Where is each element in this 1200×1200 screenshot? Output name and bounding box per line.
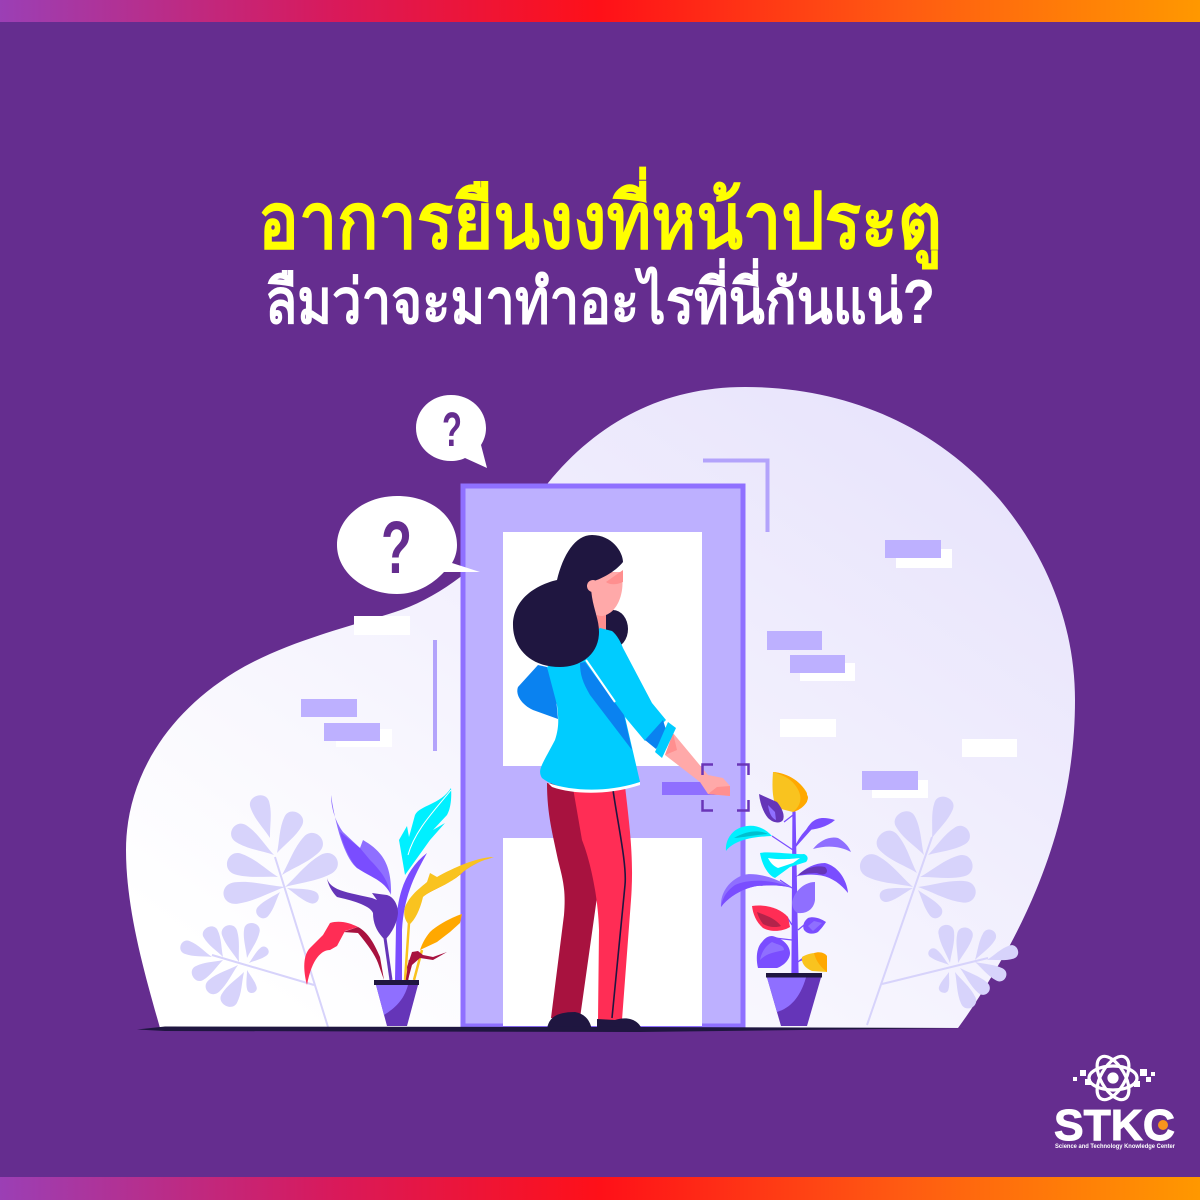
pants seam [612, 790, 625, 1018]
plant left [304, 788, 494, 1026]
white leaf centre [768, 858, 800, 868]
pot highlight [767, 978, 806, 1012]
dark purple leaf [327, 878, 398, 940]
violet top leaf [806, 818, 835, 830]
orange leaf edge [814, 952, 827, 972]
shirt hem [548, 782, 640, 793]
shirt [540, 628, 666, 792]
question mark small: ? [442, 404, 462, 457]
shoes [547, 1012, 642, 1030]
left leaf shade [721, 881, 792, 907]
title [258, 166, 942, 337]
cyan heart leaf [760, 852, 808, 878]
arm [665, 733, 730, 796]
pot [376, 985, 418, 1026]
door upper window [503, 532, 702, 766]
logo tagline: Science and Technology Knowledge Center [1055, 1144, 1176, 1150]
question mark large: ? [381, 506, 412, 589]
shirt fold [580, 662, 632, 750]
background blob [126, 387, 1075, 1028]
door frame [463, 486, 743, 1026]
lavender leaf [813, 837, 851, 852]
pot rim [766, 973, 822, 978]
pot [767, 978, 821, 1026]
shirt highlight [586, 660, 615, 702]
cuff fold [645, 720, 667, 749]
yellow bottom leaf [802, 953, 827, 972]
purple stem [385, 938, 391, 980]
pot highlight [376, 985, 408, 1015]
ground line [137, 1026, 965, 1032]
logo wordmark: STKC [1054, 1101, 1175, 1150]
cyan leaf [726, 826, 772, 851]
orange leaf [420, 914, 462, 950]
crimson stem [407, 960, 410, 980]
small leaf centre [808, 921, 822, 931]
top gradient bar [0, 0, 1200, 22]
small violet leaf [803, 917, 826, 934]
yellow top leaf [772, 772, 807, 812]
atom icon [1089, 1051, 1137, 1105]
violet stem [395, 853, 427, 980]
pot rim [374, 980, 419, 985]
violet leaf shadow [340, 832, 390, 893]
big leaf highlight [760, 942, 784, 960]
logo dot [1158, 1120, 1168, 1130]
violet leaf [331, 795, 391, 895]
cuff [655, 722, 676, 758]
speech bubble large [337, 496, 480, 594]
bottom gradient bar [0, 1177, 1200, 1200]
heading line 2: ลืมว่าจะมาทำอะไรที่นี่กันแน่? [265, 258, 935, 337]
left leg [547, 783, 598, 1018]
forehead shade [606, 570, 623, 584]
cyan leaf [399, 788, 451, 875]
fern left [178, 793, 342, 1027]
door lower window [503, 838, 702, 1026]
right leg [573, 786, 632, 1020]
dark violet leaf [797, 863, 848, 893]
STKC logo [1054, 1051, 1176, 1150]
lavender centre leaf [792, 882, 815, 913]
large left leaf [721, 874, 792, 907]
crimson leaf [407, 951, 447, 980]
yellow leaf shade [423, 857, 494, 897]
focus brackets [702, 764, 748, 810]
back hair [598, 610, 628, 648]
long hair [513, 535, 623, 667]
dark violet shade [797, 866, 827, 876]
yellow leaf edge [773, 772, 808, 812]
red leaf shade [757, 912, 781, 927]
speech bubble small [416, 395, 487, 468]
plant right [721, 772, 851, 1026]
red leaf [752, 905, 790, 931]
dark leaf centre [768, 805, 776, 820]
woman [513, 535, 748, 1030]
pixel dots [1073, 1069, 1155, 1087]
yellow leaf [404, 857, 494, 925]
fern right [856, 794, 1020, 1025]
red leaf tail [343, 927, 384, 980]
ear [587, 580, 599, 592]
red leaf [304, 922, 358, 985]
back sleeve [517, 665, 558, 719]
cyan leaf shade [734, 831, 768, 838]
accent lines [435, 460, 768, 751]
neck [596, 610, 606, 632]
arm shadow [665, 733, 730, 796]
stems [405, 923, 422, 980]
face [590, 572, 622, 616]
door [463, 486, 743, 1026]
wall bricks [301, 540, 1017, 798]
dark purple leaf [759, 794, 784, 822]
stem and branches [772, 812, 820, 973]
big violet leaf [757, 936, 790, 968]
door handle [662, 782, 722, 795]
leaf rib [408, 790, 451, 855]
heading line 1: อาการยืนงงที่หน้าประตู [258, 166, 942, 270]
